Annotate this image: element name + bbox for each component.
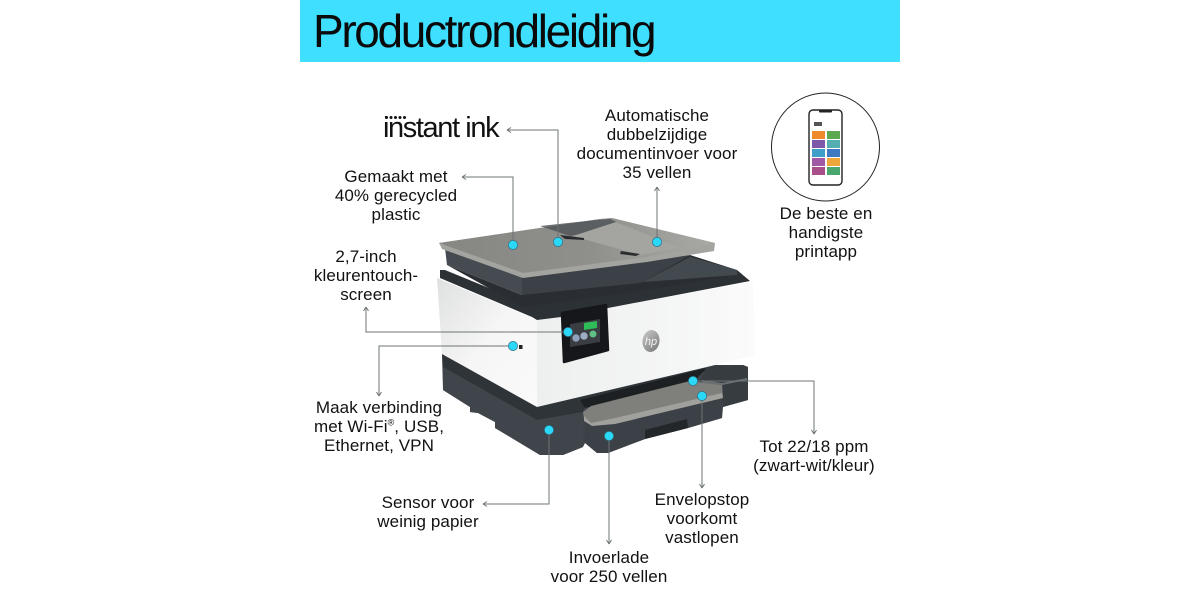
- HP logo: hp: [645, 336, 657, 348]
- printer illustration: [437, 218, 755, 455]
- label: app: De beste en: [780, 204, 872, 223]
- label: app: printapp: [795, 242, 857, 261]
- label: touchscreen: screen: [340, 285, 392, 304]
- label: input tray: Invoerlade: [569, 548, 649, 567]
- control panel with touchscreen: [562, 305, 608, 362]
- label: recycled plastic: plastic: [372, 205, 420, 224]
- HP logo: [641, 329, 661, 353]
- output paper tray: [583, 378, 747, 426]
- label: automatic document feeder: Automatische: [605, 106, 709, 125]
- label: low paper sensor: [377, 493, 479, 531]
- dark hinge band: [440, 255, 750, 320]
- white body: left face: [437, 278, 537, 407]
- label: low paper sensor: weinig papier: [377, 512, 479, 531]
- label: recycled plastic: Gemaakt met: [344, 167, 448, 186]
- label: recycled plastic: 40% gerecycled: [335, 186, 457, 205]
- label: recycled plastic: [335, 167, 457, 224]
- label: connectivity: met Wi-Fi®, USB,: [314, 417, 444, 436]
- label: envelope stop: Envelopstop: [655, 490, 749, 509]
- leader lines and arrows: [364, 128, 816, 544]
- printer base and paper cassette: [442, 354, 748, 455]
- label: automatic document feeder: documentinvoer voor: [577, 144, 737, 163]
- label: touchscreen: [314, 247, 418, 304]
- label: automatic document feeder: dubbelzijdige: [607, 125, 707, 144]
- label: app: [780, 204, 872, 261]
- title banner: Productrondleiding: [313, 5, 654, 57]
- label: envelope stop: [655, 490, 749, 547]
- wifi status icon: [519, 345, 522, 349]
- label: connectivity: Maak verbinding: [316, 398, 442, 417]
- label: low paper sensor: Sensor voor: [382, 493, 474, 512]
- label: envelope stop: vastlopen: [665, 528, 739, 547]
- label: touchscreen: 2,7-inch: [335, 247, 397, 266]
- title banner: [300, 0, 900, 62]
- scanner underside and output tray: [445, 248, 737, 307]
- label: automatic document feeder: 35 vellen: [623, 163, 691, 182]
- white body: front face: [537, 282, 755, 407]
- label: print speed: [753, 437, 875, 475]
- label: automatic document feeder: [577, 106, 737, 182]
- label: connectivity: Ethernet, VPN: [324, 436, 434, 455]
- scanner lid top: [439, 218, 715, 278]
- instant ink logo: instant ink: [383, 112, 498, 144]
- label: input tray: [550, 548, 667, 586]
- label: touchscreen: kleurentouch-: [314, 266, 418, 285]
- label: print speed: Tot 22/18 ppm: [759, 437, 869, 456]
- callout markers: [508, 237, 707, 441]
- label: envelope stop: voorkomt: [667, 509, 737, 528]
- label: connectivity: [314, 398, 444, 455]
- label: app: handigste: [789, 223, 863, 242]
- app icon: phone in circle: [772, 93, 880, 201]
- label: print speed: (zwart-wit/kleur): [753, 456, 875, 475]
- label: input tray: voor 250 vellen: [551, 567, 667, 586]
